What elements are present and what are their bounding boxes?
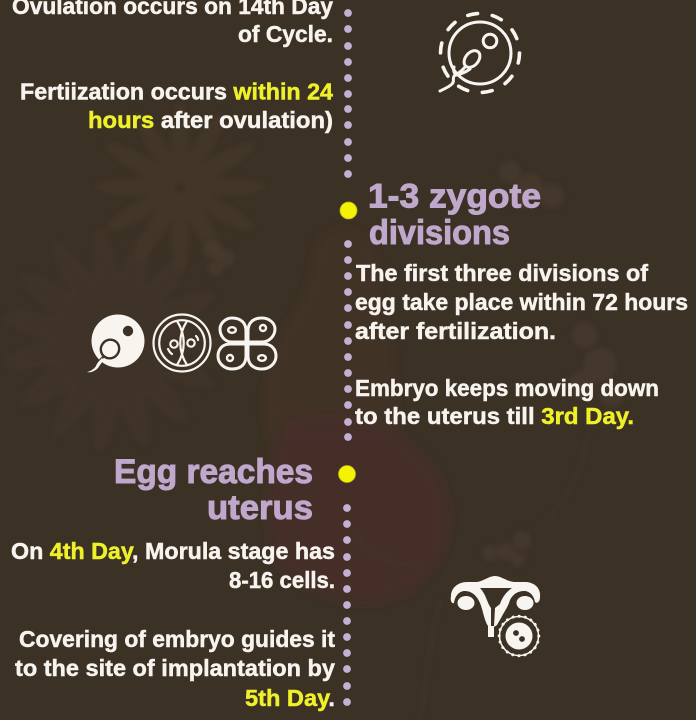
icon: sperm entering egg (430, 3, 530, 103)
icon: two-cell stage (154, 314, 210, 372)
text block: ovulation and fertilization: hours after ovulation) (88, 107, 333, 133)
text block: morula and implantation: to the site of implantation by (15, 655, 335, 681)
watermark: stems and leaves (352, 432, 588, 720)
text block: first three divisions: The first three divisions of (356, 260, 648, 286)
text block: ovulation and fertilization: of Cycle. (238, 21, 333, 47)
icon: four-cell stage (218, 318, 276, 369)
text block: ovulation and fertilization: Fertiization occurs within 24 (20, 78, 333, 104)
timeline marker: zygote divisions (340, 202, 357, 219)
background watermark: woman and flowers (0, 102, 624, 720)
text block: morula and implantation: 8-16 cells. (229, 567, 335, 593)
watermark: upper daisy (95, 102, 265, 272)
timeline marker: egg reaches uterus (338, 466, 356, 482)
icons: zygote division stages (87, 314, 276, 372)
heading: egg reaches uterus: Egg reaches (114, 453, 313, 491)
text block: first three divisions: to the uterus till 3rd Day. (355, 403, 634, 429)
heading: egg reaches uterus: uterus (207, 489, 313, 527)
watermark: small blossoms (203, 161, 624, 567)
timeline dotted line (343, 9, 352, 706)
text block: morula and implantation: On 4th Day, Morula stage has (11, 538, 335, 564)
text block: morula and implantation: 5th Day. (245, 685, 335, 711)
heading: egg reaches uterus (114, 453, 313, 527)
text block: morula and implantation (11, 538, 335, 711)
icon: fertilized egg (87, 314, 144, 372)
heading: 1-3 zygote divisions: divisions (369, 214, 510, 252)
text block: first three divisions: Embryo keeps moving down (355, 375, 659, 401)
heading: 1-3 zygote divisions (368, 178, 541, 252)
text block: morula and implantation: Covering of embryo guides it (19, 626, 335, 652)
text block: first three divisions: egg take place within 72 hours (355, 289, 688, 315)
text block: ovulation and fertilization (12, 0, 333, 133)
text block: first three divisions: after fertilization. (355, 318, 556, 344)
heading: 1-3 zygote divisions: 1-3 zygote (368, 178, 541, 216)
text block: first three divisions (355, 260, 688, 429)
icon: uterus with embryo (451, 576, 542, 659)
watermark: woman silhouette (265, 229, 448, 603)
watermark: large daisy (0, 227, 224, 453)
